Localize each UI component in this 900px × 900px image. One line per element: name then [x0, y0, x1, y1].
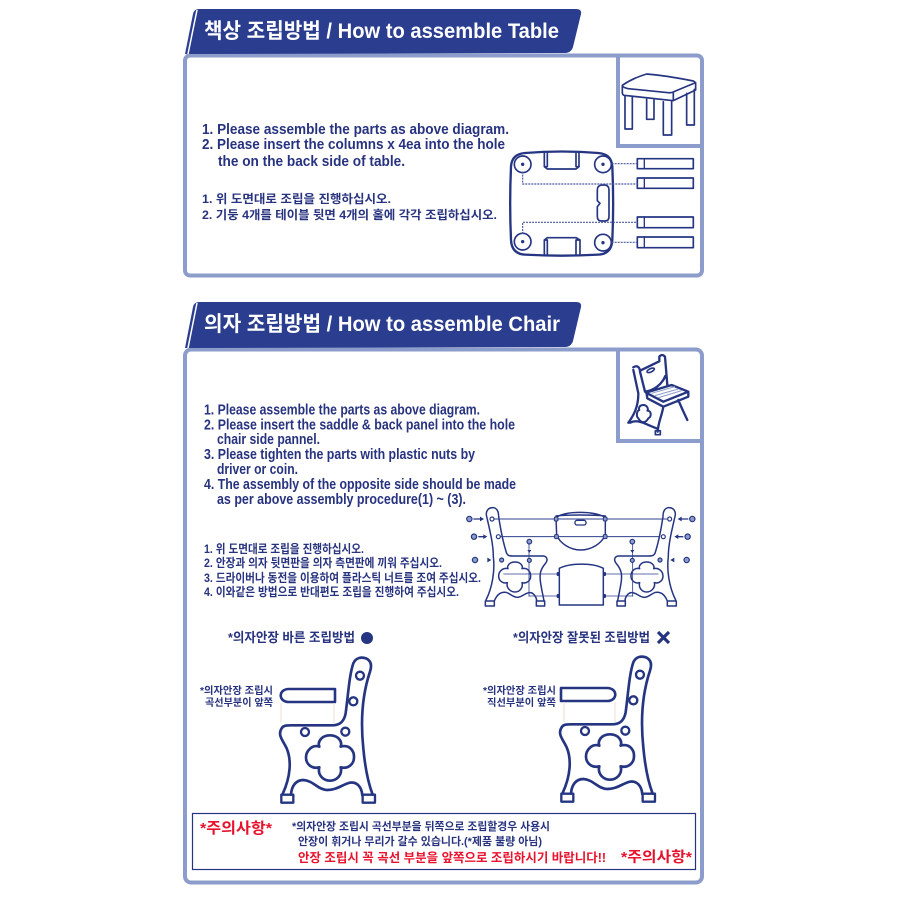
bench side illustration — [280, 658, 375, 803]
diagram: chair exploded view — [467, 508, 695, 606]
panel: table assembly — [185, 9, 702, 276]
text block: table Korean instructions: 2. 기둥 4개를 테이블 뒷면 4개의 홀에 각각 조립하십시오. — [202, 207, 497, 222]
text block: chair English instructions: 2. Please insert the saddle & back panel into the hole — [204, 416, 515, 434]
seat with straight front — [561, 688, 615, 701]
text block: chair Korean instructions: 2. 안장과 의자 뒷면판을 의자 측면판에 끼워 주십시오. — [204, 555, 442, 570]
text block: chair English instructions — [204, 402, 516, 508]
icon: cross (incorrect) — [658, 632, 669, 643]
text block: table English instructions: the on the back side of table. — [218, 153, 405, 170]
inset: chair illustration — [618, 351, 702, 441]
right side panel — [603, 508, 695, 606]
note: straight part front: *의자안장 조립시 — [483, 684, 556, 697]
text block: chair English instructions: 4. The assembly of the opposite side should be made — [204, 476, 516, 493]
caution text — [292, 819, 606, 865]
note: curved part front: 곡선부분이 앞쪽 — [205, 696, 273, 709]
heading: chair: 의자 조립방법 / How to assemble Chair — [204, 313, 560, 336]
icon: table — [622, 74, 696, 135]
text block: table English instructions: 1. Please assemble the parts as above diagram. — [202, 121, 509, 138]
seat guide lines — [281, 703, 334, 723]
text block: chair Korean instructions — [204, 541, 481, 599]
caution text: 안장 조립시 꼭 곡선 부분을 앞쪽으로 조립하시기 바랍니다!! — [298, 850, 606, 865]
backrest — [554, 512, 607, 550]
diagram: correct bench side — [200, 658, 375, 803]
text block: table Korean instructions — [202, 191, 497, 222]
icon: chair — [628, 355, 688, 435]
dashed guide lines — [523, 164, 637, 242]
caution label left: *주의사항* — [200, 820, 272, 837]
seat with curved front — [281, 689, 335, 702]
label: correct seat assembly: *의자안장 바른 조립방법 — [228, 630, 355, 645]
text block: table Korean instructions: 1. 위 도면대로 조립을 진행하십시오. — [202, 191, 391, 206]
seat — [557, 564, 606, 605]
table underside — [510, 151, 613, 256]
diagram: incorrect bench side — [483, 657, 655, 802]
panel: chair assembly — [185, 302, 702, 882]
text block: chair Korean instructions: 3. 드라이버나 동전을 이용하여 플라스틱 너트를 조여 주십시오. — [204, 571, 481, 585]
icon: circle (correct) — [361, 632, 373, 644]
caution text: *의자안장 조립시 곡선부분을 뒤쪽으로 조립할경우 사용시 — [292, 819, 550, 833]
caution text: 안장이 휘거나 무리가 갈수 있습니다.(*제품 불량 아님) — [298, 834, 542, 848]
columns — [637, 159, 693, 248]
heading: table: 책상 조립방법 / How to assemble Table — [204, 20, 559, 43]
heading: chair — [185, 302, 581, 348]
diagram: table underside with four columns — [510, 151, 693, 256]
text block: chair English instructions: 1. Please assemble the parts as above diagram. — [204, 402, 480, 418]
note: straight part front — [483, 684, 556, 709]
bench side illustration — [560, 657, 655, 802]
callout: cautions — [192, 814, 696, 870]
note: curved part front — [200, 684, 273, 709]
text block: chair English instructions: driver or coin. — [217, 461, 298, 478]
seat guide lines — [564, 702, 615, 722]
connecting guide lines — [493, 519, 668, 537]
text block: table English instructions — [202, 121, 509, 170]
text block: chair English instructions: as per above assembly procedure(1) ~ (3). — [217, 491, 466, 508]
text block: chair Korean instructions: 1. 위 도면대로 조립을 진행하십시오. — [204, 541, 364, 556]
caution label right: *주의사항* — [621, 849, 692, 866]
text block: chair Korean instructions: 4. 이와같은 방법으로 반대편도 조립을 진행하여 주십시오. — [204, 584, 459, 599]
panel frame: table — [185, 56, 702, 276]
heading: table — [185, 9, 581, 54]
text block: chair English instructions: 3. Please tighten the parts with plastic nuts by — [204, 446, 476, 463]
panel frame: chair — [185, 350, 702, 882]
note: straight part front: 직선부분이 앞쪽 — [487, 696, 556, 709]
inset: table illustration — [618, 56, 702, 146]
note: curved part front: *의자안장 조립시 — [200, 684, 273, 697]
left side panel — [467, 508, 558, 606]
label: incorrect seat assembly: *의자안장 잘못된 조립방법 — [513, 630, 650, 645]
text block: chair English instructions: chair side pannel. — [217, 431, 320, 448]
text block: table English instructions: 2. Please insert the columns x 4ea into the hole — [202, 136, 505, 153]
